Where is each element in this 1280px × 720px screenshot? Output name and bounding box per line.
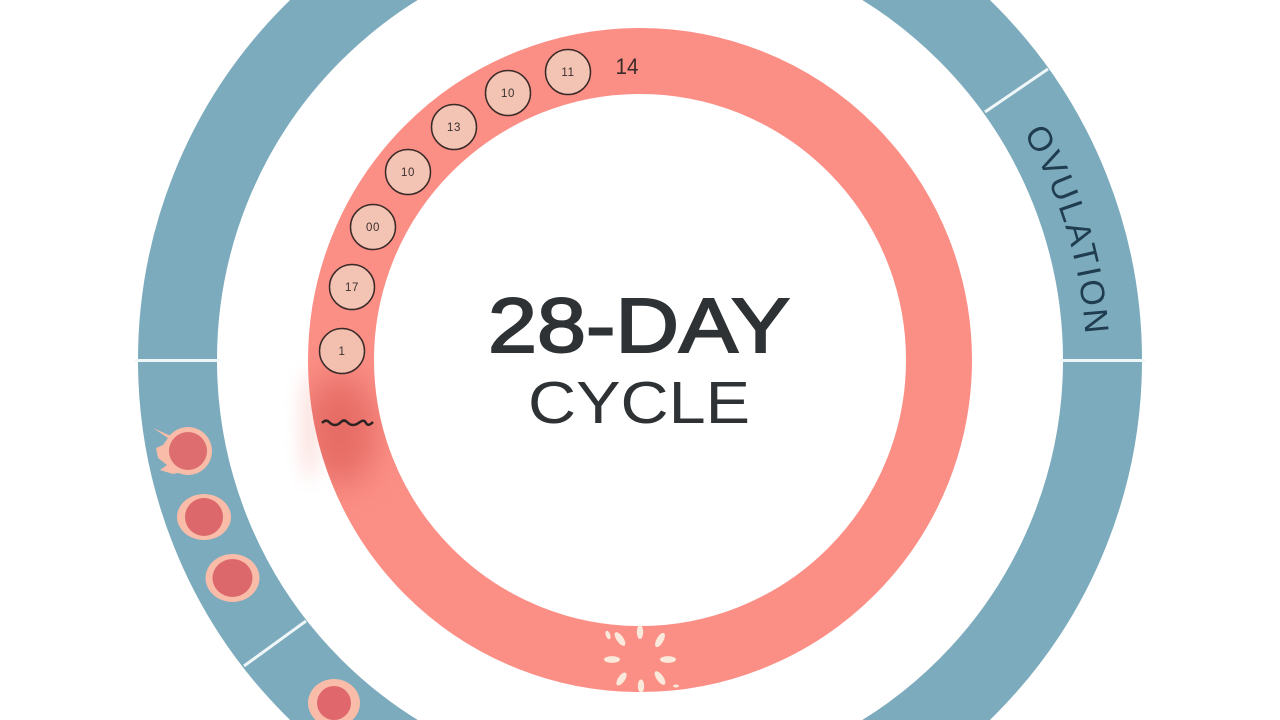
pink ring: 28-day cycle track	[341, 61, 939, 659]
inner white disc guard	[374, 94, 906, 626]
day marker: 10: 10	[501, 88, 515, 100]
glow: soft shadow outside pink ring	[302, 370, 318, 480]
day marker: 00: 00	[366, 222, 380, 234]
title line: CYCLE: CYCLE	[528, 370, 750, 436]
icon: follicle 2	[177, 494, 231, 540]
day marker: 11: 11	[561, 67, 575, 79]
day marker: 10	[486, 70, 530, 116]
day marker: 13: 13	[447, 122, 461, 134]
day marker: 13	[432, 104, 476, 150]
menstrual shading on ring	[304, 375, 376, 485]
day marker: 10	[386, 150, 430, 194]
day marker: 1	[320, 328, 364, 374]
day marker: 17: 17	[345, 282, 359, 294]
divider: right horizontal	[1060, 359, 1145, 362]
divider: left horizontal	[135, 359, 220, 362]
title line: 28-DAY: 28-DAY	[488, 283, 790, 369]
outer ring: cycle phases	[135, 0, 1145, 720]
day marker: 11	[546, 50, 590, 94]
day marker: 1: 1	[338, 346, 346, 358]
icon: ovulation burst	[604, 625, 679, 692]
icon: follicle 4	[308, 679, 360, 720]
icon: wave	[322, 420, 373, 425]
day label: 14: 14	[616, 54, 638, 79]
day marker: 10: 10	[401, 167, 415, 179]
icon: follicle 3	[206, 554, 260, 602]
day marker: 17	[330, 264, 374, 310]
label: ovulation: OVULATION	[1028, 126, 1108, 332]
title	[488, 283, 790, 436]
day marker: 00	[350, 204, 396, 250]
divider: lower left	[244, 621, 306, 666]
divider: upper right	[985, 69, 1048, 112]
icon: follicle with spikes	[153, 427, 212, 475]
